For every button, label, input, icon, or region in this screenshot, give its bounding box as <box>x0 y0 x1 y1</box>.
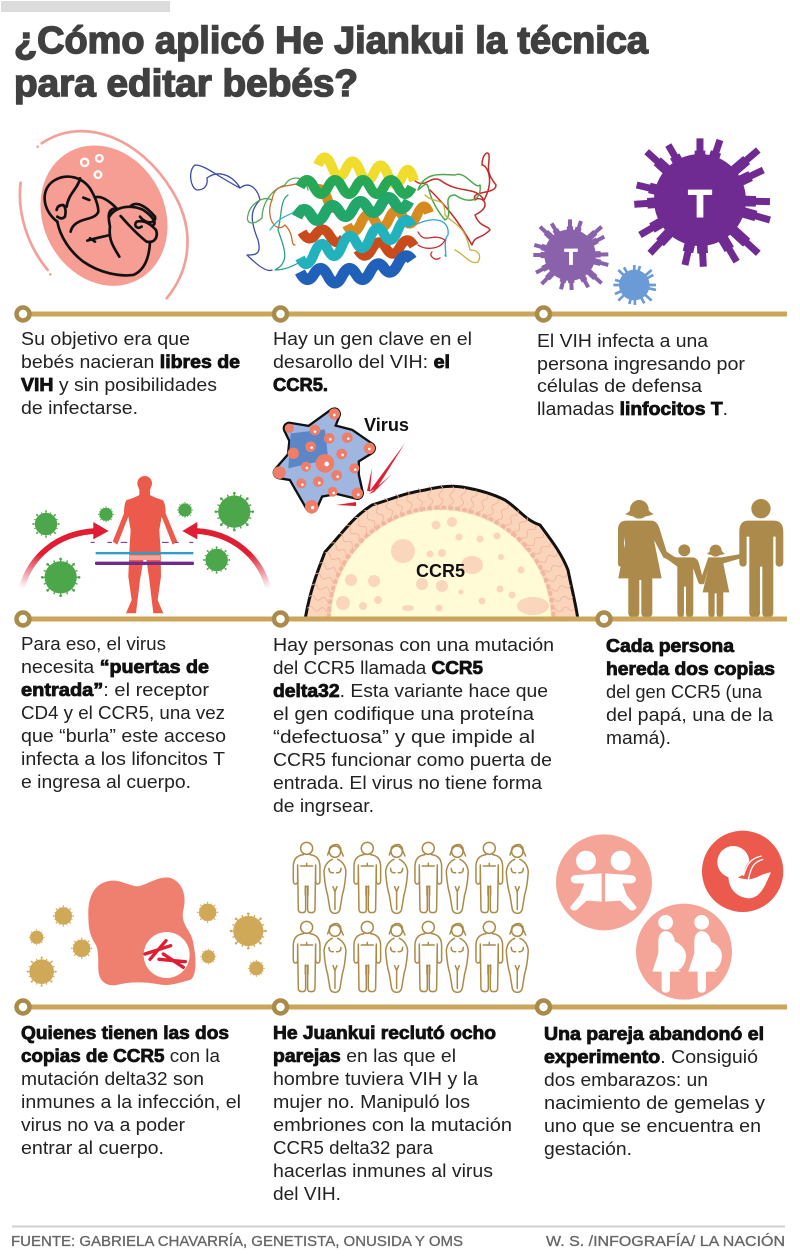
text block 5: de ingrsear. <box>273 796 374 816</box>
text block 4 <box>21 634 226 792</box>
text block 4: e ingresa al cuerpo. <box>21 772 191 792</box>
text block 6: del gen CCR5 (una <box>606 682 763 702</box>
label CCR5: CCR5 <box>416 561 465 581</box>
author credit: W. S. /INFOGRAFÍA/ LA NACIÓN <box>546 1233 785 1250</box>
illustration: immune cell with chromosomes <box>27 878 267 987</box>
illustration: human body with viruses and arrows <box>22 476 268 613</box>
text block 1: bebés nacieran libres de <box>21 352 240 372</box>
text block 5: entrada. El virus no tiene forma <box>273 773 543 793</box>
text block 8 <box>273 1023 512 1204</box>
mother <box>618 500 678 617</box>
text block 5: el gen codifique una proteína <box>273 704 535 724</box>
text block 9: nacimiento de gemelas y <box>544 1093 765 1113</box>
label Virus: Virus <box>364 415 409 435</box>
text block 6: Cada persona <box>606 636 735 656</box>
text block 7: copias de CCR5 con la <box>21 1046 221 1066</box>
text block 3: persona ingresando por <box>537 354 745 374</box>
father <box>739 499 783 617</box>
text block 1: Su objetivo era que <box>21 329 190 349</box>
illustration: medium T lymphocyte <box>533 219 608 290</box>
text block 6: del papá, una de la <box>606 705 774 725</box>
impact sparks <box>336 443 405 506</box>
cell blob <box>88 878 196 985</box>
text block 8: del VIH. <box>273 1184 341 1204</box>
human figure <box>113 476 177 613</box>
text block 7: Quienes tienen las dos <box>21 1023 229 1043</box>
boy <box>668 544 703 617</box>
text block 2: CCR5. <box>273 375 328 395</box>
text block 3: El VIH infecta a una <box>537 331 709 351</box>
text block 6: mamá). <box>606 728 671 748</box>
text block 4: Para eso, el virus <box>21 634 166 654</box>
text block 8: CCR5 delta32 para <box>273 1138 434 1158</box>
text block 5: CCR5 funcionar como puerta de <box>273 750 552 770</box>
text block 4: entrada” : el receptor <box>21 680 209 700</box>
timeline row 2 <box>16 612 787 626</box>
text block 3 <box>537 331 745 419</box>
top grey bar <box>1 1 170 12</box>
text block 3: células de defensa <box>537 376 703 396</box>
green viruses <box>32 492 254 597</box>
text block 6 <box>606 636 775 748</box>
text block 7 <box>21 1023 241 1158</box>
text block 5: del CCR5 llamada CCR5 <box>273 658 483 678</box>
icon: fetus <box>702 831 783 912</box>
protein loops <box>191 153 496 270</box>
text block 1: de infectarse. <box>21 398 138 418</box>
icon: two pregnant women <box>636 904 732 1000</box>
text block 8: embriones con la mutación <box>273 1115 512 1135</box>
text block 9 <box>544 1024 765 1159</box>
text block 4: necesita “puertas de <box>21 657 209 677</box>
illustration: CCR5 protein structure <box>191 153 496 283</box>
illustration: large T lymphocyte: T <box>688 182 712 226</box>
text block 4: que “burla” este acceso <box>21 726 226 746</box>
timeline row 1 <box>16 308 787 320</box>
text block 2 <box>273 329 472 395</box>
text block 9: experimento . Consiguió <box>544 1047 758 1067</box>
text block 7: inmunes a la infección, el <box>21 1092 241 1112</box>
text block 5 <box>273 635 554 816</box>
text block 5: Hay personas con una mutación <box>273 635 554 655</box>
timeline row 3 <box>16 1000 787 1014</box>
illustration: cell with CCR5 <box>304 484 579 616</box>
text block 7: entrar al cuerpo. <box>21 1138 164 1158</box>
text block 4: infecta a los lifoncitos T <box>21 749 225 769</box>
text block 2: desarollo del VIH: el <box>273 352 450 372</box>
text block 9: uno que se encuentra en <box>544 1116 761 1136</box>
text block 5: “defectuosa” y que impide al <box>273 727 535 747</box>
title: para editar bebés? <box>14 63 358 105</box>
protein helices <box>297 157 429 283</box>
text block 8: mujer no. Manipuló los <box>273 1092 470 1112</box>
gold viruses <box>27 902 267 987</box>
text block 8: He Juankui reclutó ocho <box>273 1023 496 1043</box>
text block 8: parejas en las que el <box>273 1046 456 1066</box>
text block 6: hereda dos copias <box>606 659 775 679</box>
text block 1 <box>21 329 240 418</box>
text block 3: llamadas linfocitos T . <box>537 399 728 419</box>
membrane <box>307 486 575 616</box>
illustration: family <box>618 499 783 617</box>
text block 4: CD4 y el CCR5, una vez <box>21 703 225 723</box>
illustration: medium T lymphocyte: T <box>564 244 578 269</box>
text block 7: mutación delta32 son <box>21 1069 204 1089</box>
illustration: eight couples <box>293 842 528 992</box>
text block 8: hombre tuviera VIH y la <box>273 1069 479 1089</box>
red arrows <box>22 522 268 588</box>
text block 8: hacerlas inmunes al virus <box>273 1161 493 1181</box>
girl <box>700 545 741 617</box>
text block 9: dos embarazos: un <box>544 1070 708 1090</box>
text block 9: Una pareja abandonó el <box>544 1024 764 1044</box>
text block 1: VIH y sin posibilidades <box>21 375 217 395</box>
source credit: FUENTE: GABRIELA CHAVARRÍA, GENETISTA, ONUSIDA Y OMS <box>11 1233 463 1250</box>
chromosomes <box>145 941 185 967</box>
illustration: virus particle <box>273 408 375 513</box>
title: ¿Cómo aplicó He Jiankui la técnica <box>14 20 649 62</box>
text block 9: gestación. <box>544 1139 632 1159</box>
text block 5: delta32 . Esta variante hace que <box>273 681 548 701</box>
text block 2: Hay un gen clave en el <box>273 329 472 349</box>
text block 7: virus no va a poder <box>21 1115 185 1135</box>
level lines <box>91 542 194 565</box>
title <box>14 20 649 105</box>
illustration: baby in womb <box>16 123 192 308</box>
icon: twins <box>556 834 652 930</box>
cell spots <box>336 517 549 615</box>
illustration: large T lymphocyte <box>634 138 770 267</box>
illustration: small blue cell <box>613 265 656 305</box>
